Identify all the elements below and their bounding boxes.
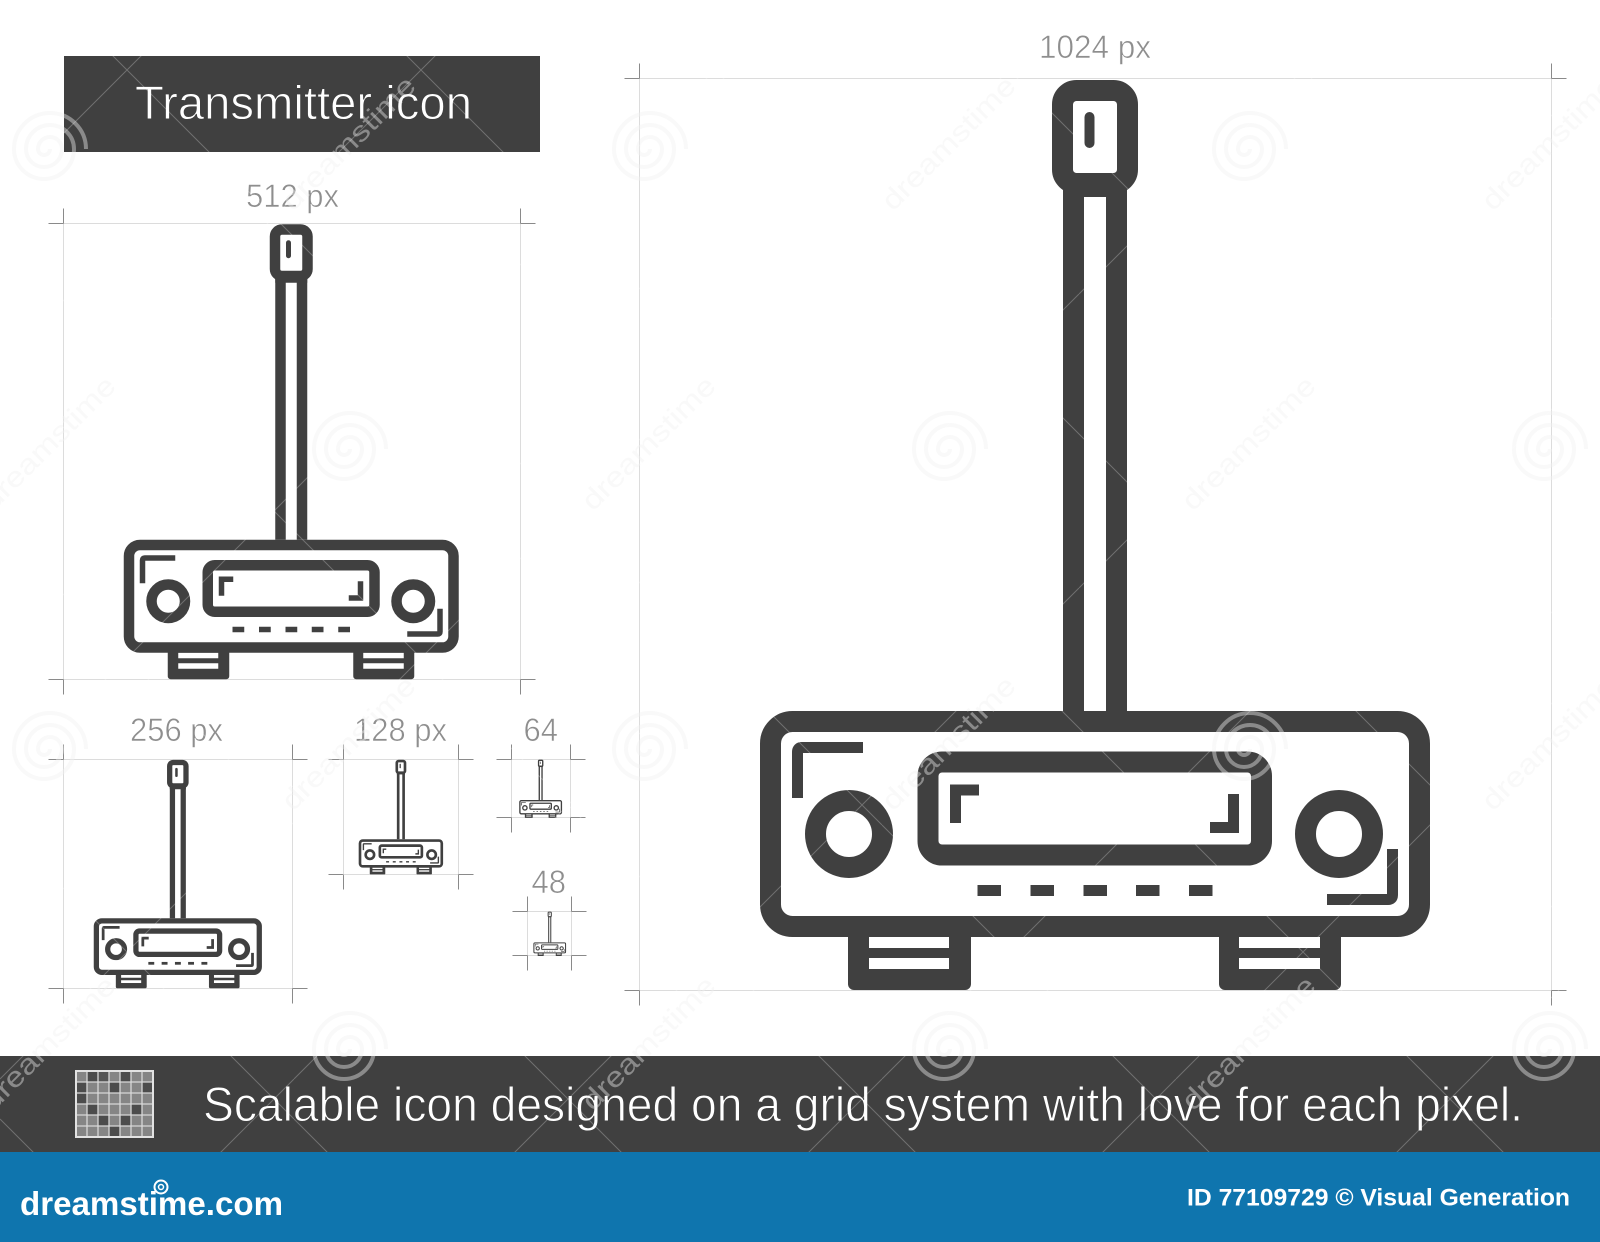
title: Transmitter icon xyxy=(135,76,472,129)
watermark overlay: dreamstime xyxy=(875,670,1022,816)
panel: 512 px icon size xyxy=(48,178,536,694)
footer bar xyxy=(0,1152,1600,1242)
panel: 64 px icon size xyxy=(496,712,586,832)
panel: 128 px icon size xyxy=(328,712,474,890)
panel: 256 px icon size xyxy=(48,712,308,1004)
icon: transmitter 512 px xyxy=(129,230,454,679)
icon: transmitter 128 px xyxy=(360,761,442,874)
tagline: Scalable icon designed on a grid system with love for each pixel. xyxy=(203,1079,1523,1132)
icon: transmitter 1024 px xyxy=(770,90,1420,990)
image id and credit: ID 77109729 © Visual Generation xyxy=(1187,1184,1570,1212)
size label: 128 px: 128 px xyxy=(354,712,447,748)
watermark overlay: dreamstime xyxy=(275,70,422,216)
size label: 256 px: 256 px xyxy=(130,712,223,748)
size label: 64: 64 xyxy=(524,712,558,748)
size label: 1024 px: 1024 px xyxy=(1039,29,1151,65)
icon: transmitter 256 px xyxy=(96,763,259,988)
size label: 512 px: 512 px xyxy=(246,178,339,214)
icon: pixel grid xyxy=(76,1071,153,1137)
watermark overlay: dreamstime xyxy=(1175,970,1322,1116)
panel: 48 px icon size xyxy=(512,864,586,970)
icon: transmitter 64 px xyxy=(520,760,561,818)
watermark overlay: dreamstime xyxy=(575,970,722,1116)
logo: dreamstime.com: dreamstime.com xyxy=(20,1185,283,1222)
watermark overlay: dreamstime xyxy=(875,70,1022,216)
size label: 48: 48 xyxy=(532,864,566,900)
watermark overlay: dreamstime xyxy=(1175,370,1322,516)
panel: 1024 px icon size xyxy=(624,29,1566,1006)
watermark overlay: dreamstime xyxy=(575,370,722,516)
title banner xyxy=(64,56,540,152)
icon: transmitter 48 px xyxy=(534,912,566,956)
watermark overlay: dreamstime xyxy=(1475,670,1600,816)
watermark overlay: dreamstime xyxy=(275,670,422,816)
watermark overlay: dreamstime xyxy=(1475,70,1600,216)
grid system band xyxy=(0,1056,1600,1152)
